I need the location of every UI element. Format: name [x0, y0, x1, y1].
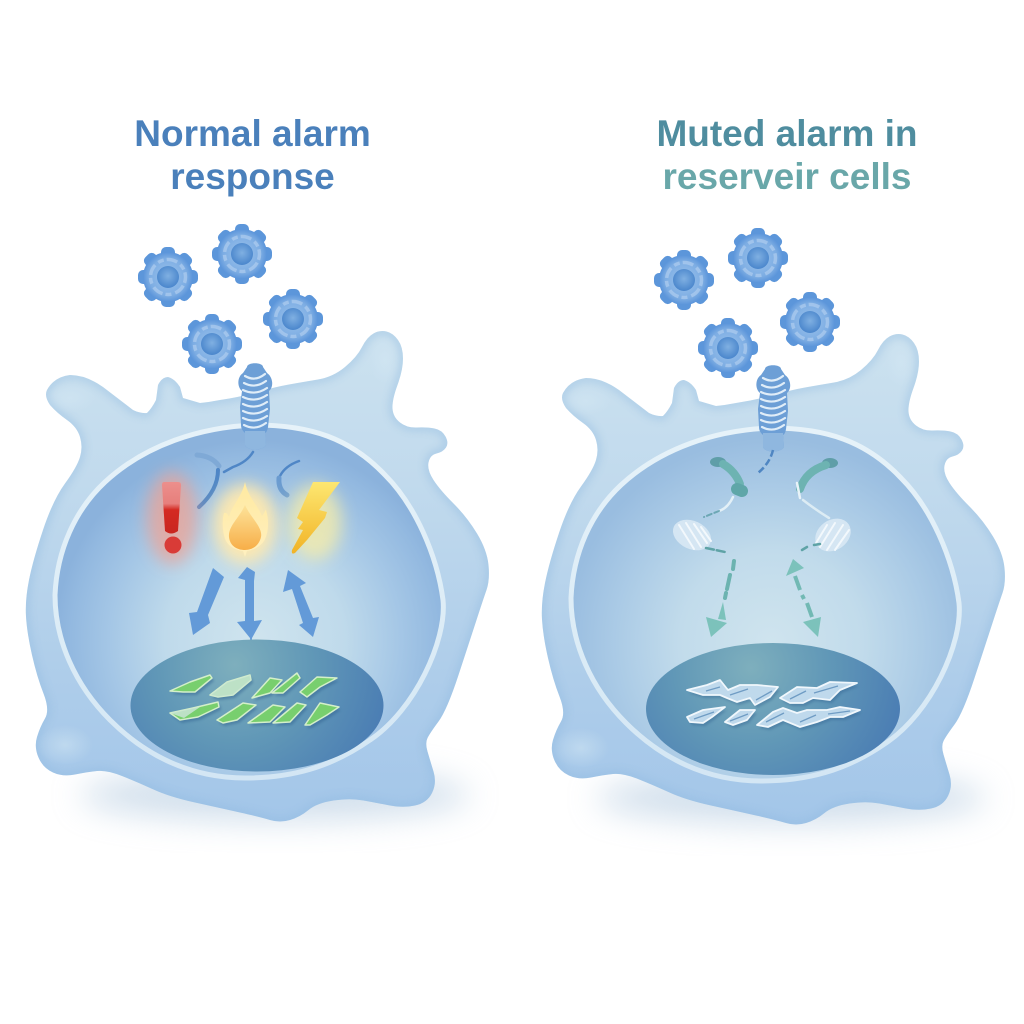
title: muted alarm in reserveir cells: reserveir cells [663, 156, 911, 197]
icon: flame [213, 482, 277, 564]
nucleus [646, 643, 900, 775]
icon group: right cytokine gears [654, 228, 840, 378]
genes: active green [170, 673, 341, 728]
title: normal alarm response [134, 113, 371, 197]
right muted pathway [797, 458, 857, 558]
title: normal alarm response: response [170, 156, 335, 197]
panel: normal alarm cell [26, 331, 489, 822]
title: normal alarm response: Normal alarm [134, 113, 371, 154]
signal dashes from receptor [758, 450, 773, 473]
genes: silenced pale [687, 680, 862, 730]
icon: red exclamation mark [147, 472, 197, 564]
panel: muted alarm cell [542, 334, 1005, 824]
title: muted alarm in reserveir cells: Muted alarm in [656, 113, 918, 154]
icon: lightning bolt [288, 482, 342, 560]
left muted pathway [668, 457, 742, 556]
arrow: centre double [237, 567, 262, 650]
arrow: right double [283, 570, 319, 637]
arrow: left diagonal [189, 568, 224, 635]
cell body [26, 331, 489, 822]
receptor [756, 365, 790, 452]
cell edge shading [542, 334, 1005, 824]
cell ground shadow [80, 769, 470, 821]
inner chamber with membrane [571, 428, 959, 781]
title: muted alarm in reserveir cells [656, 113, 918, 197]
signal fragments [197, 452, 299, 507]
cell body [542, 334, 1005, 824]
arrow: muted right double dashed [786, 559, 821, 637]
icon group: left cytokine gears [138, 224, 323, 374]
inner chamber with membrane [55, 425, 443, 778]
nucleus [130, 640, 384, 772]
receptor [238, 363, 272, 450]
cell ground shadow [596, 772, 986, 824]
arrow: muted left dashed [706, 561, 734, 637]
cell edge shading [26, 331, 489, 822]
